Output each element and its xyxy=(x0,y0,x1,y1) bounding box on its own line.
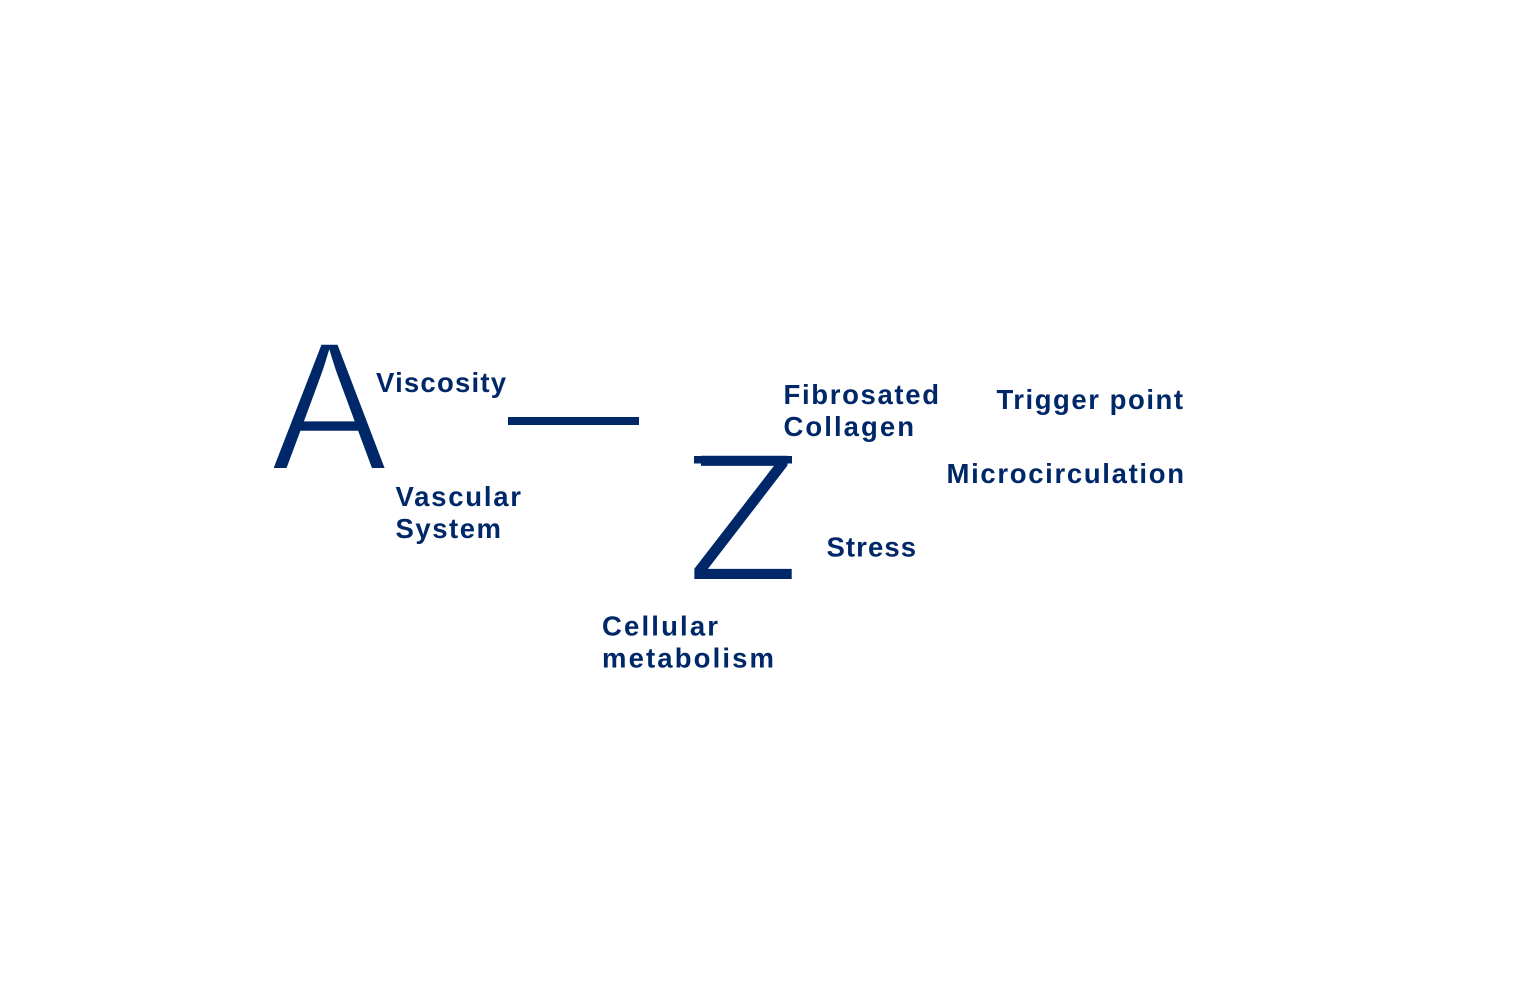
label: Vascular System: System xyxy=(396,513,501,544)
label: Cellular metabolism: metabolism xyxy=(602,642,774,674)
label: Cellular metabolism: Cellular xyxy=(602,610,718,642)
label: Vascular System: Vascular xyxy=(396,481,521,512)
letter A: A xyxy=(270,304,388,510)
dash between A and Z xyxy=(508,417,639,425)
label: Trigger point: Trigger point xyxy=(996,384,1183,415)
label: Stress: Stress xyxy=(826,532,916,562)
label: Microcirculation: Microcirculation xyxy=(946,458,1184,489)
label: Viscosity: Viscosity xyxy=(376,367,507,398)
label: Vascular System xyxy=(396,481,521,544)
label: Fibrosated Collagen: Collagen xyxy=(784,411,914,442)
label: Cellular metabolism xyxy=(602,610,774,674)
label: Fibrosated Collagen: Fibrosated xyxy=(784,379,939,410)
label: Fibrosated Collagen xyxy=(784,379,939,442)
letter Z: Z xyxy=(686,415,800,621)
